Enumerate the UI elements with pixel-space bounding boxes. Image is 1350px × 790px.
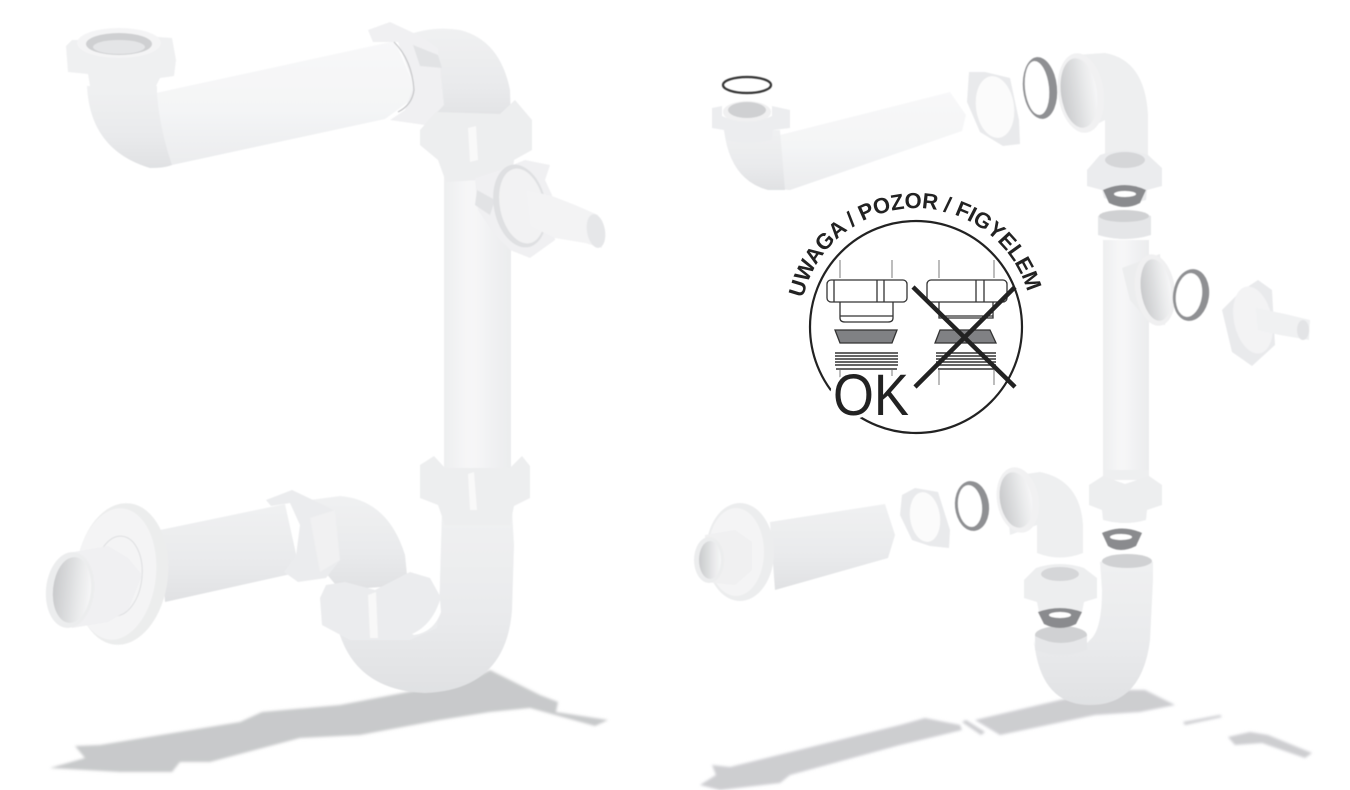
top coupling ring [967, 72, 1020, 146]
trap nut left [320, 572, 440, 640]
side inlet fitting [475, 160, 608, 258]
shadow of assembled siphon [50, 670, 608, 772]
OK mark: OK [833, 363, 909, 428]
shadows of exploded parts [700, 690, 1312, 790]
lower coupling ring [900, 488, 950, 548]
wall flange [69, 499, 175, 649]
lower stack nut [1089, 470, 1162, 523]
J trap exploded [1034, 557, 1153, 705]
correct assembly diagram [827, 260, 907, 380]
outlet spigot [42, 546, 142, 630]
caution badge: UWAGA / POZOR / FIGYELEM [788, 192, 1042, 316]
stack top nut [420, 100, 532, 182]
trap nut [1024, 564, 1097, 616]
lower elbow [992, 464, 1083, 558]
lower tube [770, 504, 895, 590]
side spigot nut [1222, 280, 1310, 366]
trap inner gap [412, 600, 441, 635]
top horizontal tube [156, 41, 414, 166]
outlet spigot [694, 530, 752, 585]
lower conical gasket [1102, 528, 1142, 550]
top-left nut [712, 101, 790, 143]
side grey ring [1170, 267, 1212, 323]
top-left nut with thread [66, 28, 176, 91]
top tube [766, 92, 966, 190]
conical gasket [1103, 185, 1146, 207]
badge circle [810, 221, 1022, 433]
top-left bend [87, 86, 172, 168]
J trap [335, 510, 514, 693]
lower elbow [310, 496, 408, 590]
side T branch [1122, 252, 1180, 328]
vertical T tube [1098, 210, 1151, 475]
top-left bend [724, 130, 785, 190]
lower elbow coupling nut [266, 490, 340, 582]
lower stack nut [420, 456, 530, 525]
circular heading [803, 208, 1029, 298]
trap rims [1035, 554, 1152, 655]
wall flange [706, 503, 774, 601]
O-ring [723, 77, 771, 93]
top right elbow [410, 29, 511, 125]
top grey ring [1020, 55, 1060, 121]
right: exploded siphon [694, 50, 1312, 790]
incorrect assembly diagram [927, 260, 1007, 385]
top elbow [1053, 50, 1148, 160]
left: assembled siphon [42, 22, 608, 772]
nut [1087, 150, 1162, 203]
top elbow coupling nut [368, 22, 444, 125]
X mark [913, 287, 1015, 387]
vertical stack tube [444, 150, 511, 470]
lower grey ring [952, 479, 992, 533]
caution badge [788, 192, 1042, 434]
lower horizontal tube [160, 504, 300, 602]
trap gasket [1038, 608, 1082, 628]
